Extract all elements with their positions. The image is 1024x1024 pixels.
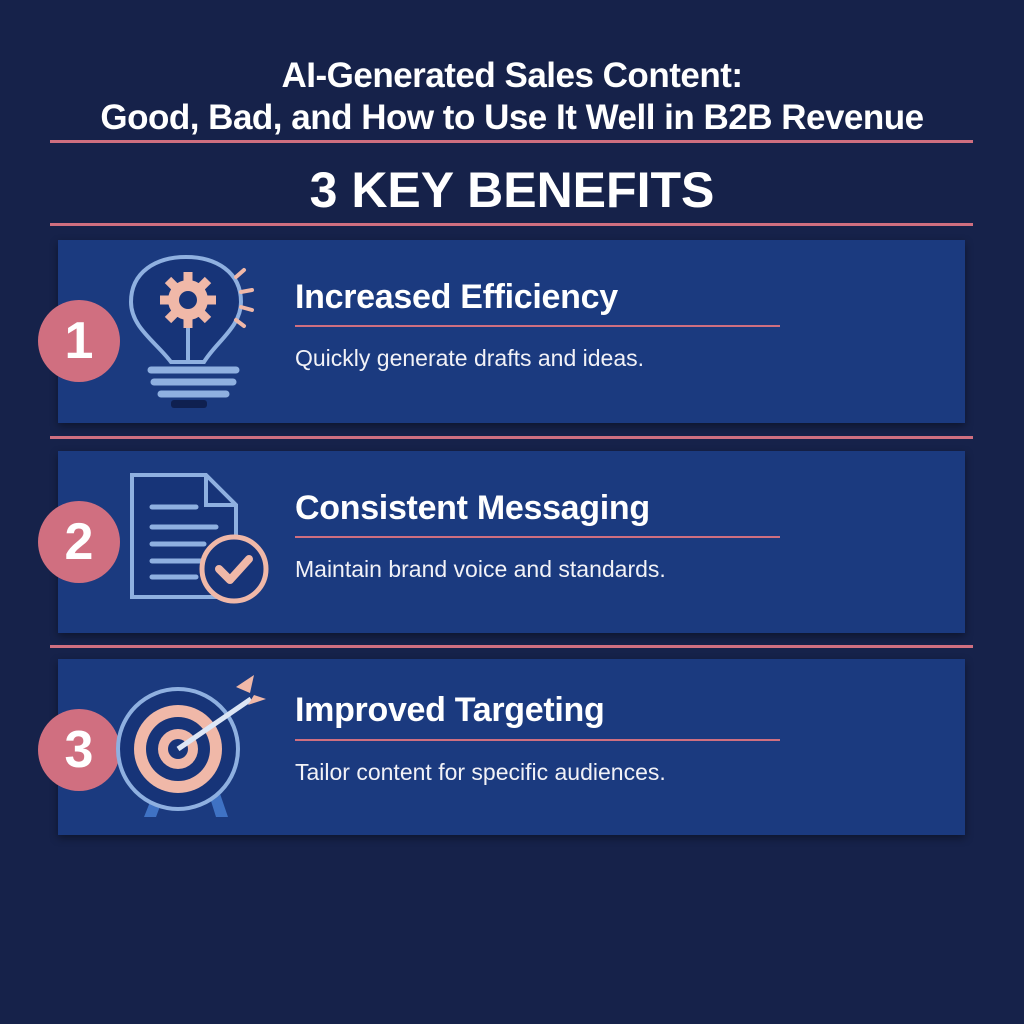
- subtitle: 3 KEY BENEFITS: [310, 162, 714, 218]
- number 1: 1: [65, 312, 93, 370]
- icon: target with arrow: [116, 675, 266, 817]
- number 1: [38, 300, 120, 382]
- panel: benefit 3: [58, 659, 965, 835]
- heading 3: Improved Targeting: [295, 691, 604, 729]
- number 3: [38, 709, 120, 791]
- panel: benefit 2: [58, 451, 965, 633]
- title: AI-Generated Sales Content:: [281, 56, 743, 95]
- text 3: Tailor content for specific audiences.: [295, 759, 666, 785]
- number 3: 3: [65, 721, 93, 779]
- icon: document with check: [130, 473, 268, 604]
- panel: benefit 1: [58, 240, 965, 423]
- icon: lightbulb with gear: [129, 255, 254, 408]
- heading 1: Increased Efficiency: [295, 278, 618, 316]
- number 2: 2: [65, 513, 93, 571]
- text 1: Quickly generate drafts and ideas.: [295, 345, 644, 371]
- number 2: [38, 501, 120, 583]
- title: [100, 56, 924, 137]
- heading 2: Consistent Messaging: [295, 489, 650, 527]
- title: Good, Bad, and How to Use It Well in B2B Revenue: [100, 98, 924, 137]
- text 2: Maintain brand voice and standards.: [295, 556, 666, 582]
